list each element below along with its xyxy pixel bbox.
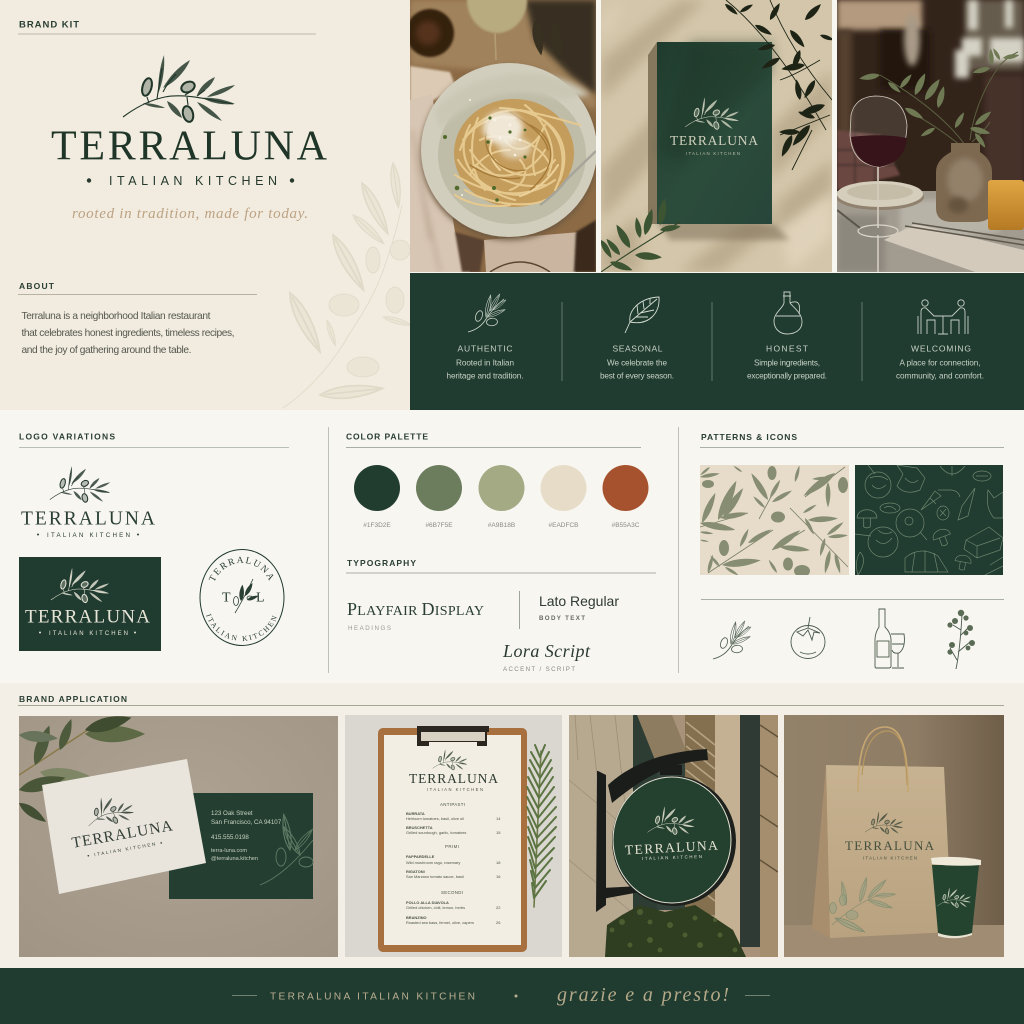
sample: body font: Lato Regular	[539, 593, 619, 609]
swatch: terracotta	[602, 465, 648, 529]
napkin and cutlery	[884, 224, 1024, 272]
panel: color palette	[346, 432, 648, 529]
menu text: San Marzano tomato sauce, basil	[406, 874, 464, 879]
icon: olive sprig	[713, 620, 752, 659]
icon: leaf	[625, 297, 659, 333]
photo: pasta plate	[406, 0, 597, 272]
value: welcoming: A place for connection,	[900, 358, 980, 368]
heading: brand application: BRAND APPLICATION	[19, 694, 127, 704]
primary logo on light: ITALIAN KITCHEN	[47, 532, 130, 539]
icon: tomato	[791, 617, 825, 658]
menu text: 22	[496, 905, 501, 910]
menu text: 26	[496, 920, 501, 925]
menu text: Roasted sea bass, fennel, olive, capers	[406, 920, 474, 925]
value: welcoming	[896, 300, 984, 380]
menu text: 14	[496, 816, 501, 821]
menu text: TERRALUNA	[409, 771, 498, 786]
menu text: BRANZINO	[406, 915, 427, 920]
vase	[936, 143, 992, 222]
stone wall	[569, 715, 635, 957]
value: seasonal: best of every season.	[600, 372, 674, 380]
primary logo	[51, 55, 328, 222]
white logo card	[42, 759, 206, 894]
about text	[22, 311, 234, 356]
menu text: BRUSCHETTA	[406, 825, 433, 830]
mockup: paper bag and cup	[784, 715, 1004, 957]
footer script sign-off: grazie e a presto!	[557, 984, 729, 1006]
bag	[812, 727, 952, 938]
olive leaves	[16, 711, 145, 826]
footer band	[0, 968, 1024, 1024]
mockup: business cards	[16, 711, 338, 957]
sample: script font: ACCENT / SCRIPT	[503, 666, 575, 673]
heading: about: ABOUT	[19, 281, 55, 291]
value: authentic	[446, 293, 524, 380]
menu text: Wild mushroom ragu, rosemary	[406, 860, 460, 865]
menu text: 18	[496, 860, 501, 865]
menu text: 15	[496, 830, 501, 835]
sample: body font: BODY TEXT	[539, 615, 585, 622]
value: authentic: heritage and tradition.	[446, 372, 524, 380]
logo tagline: italian kitchen: ITALIAN KITCHEN	[109, 174, 277, 188]
about text: Terraluna is a neighborhood Italian restaurant	[22, 311, 211, 322]
circular badge logo: TERRALUNA	[208, 556, 274, 582]
about text: that celebrates honest ingredients, timeless recipes,	[22, 328, 234, 339]
swatch: olive: #6B7F5E	[425, 522, 453, 529]
menu text: ITALIAN KITCHEN	[427, 787, 483, 792]
heading: brand kit: BRAND KIT	[19, 20, 79, 30]
green contact card	[169, 793, 314, 899]
panel: patterns and icons	[699, 432, 1004, 669]
swatch: cream: #EADFCB	[549, 522, 578, 529]
watermark olive branch	[283, 162, 413, 408]
menu text: Grilled sourdough, garlic, tomatoes	[406, 830, 466, 835]
round sign: ITALIAN KITCHEN	[642, 854, 702, 861]
panel: logo variations	[19, 432, 289, 651]
heading: patterns and icons: PATTERNS & ICONS	[701, 432, 797, 442]
icon: olive sprig	[468, 293, 507, 332]
menu text: 16	[496, 874, 501, 879]
value: seasonal	[600, 297, 674, 380]
value: honest: HONEST	[766, 344, 808, 354]
primary logo on light	[21, 466, 155, 539]
panel: brand application	[0, 683, 1024, 1024]
mockup: menu clipboard	[345, 715, 562, 957]
green contact card: San Francisco, CA 94107	[211, 819, 282, 826]
round sign	[612, 776, 736, 906]
circular badge logo: L	[256, 590, 265, 606]
olive sprig in vase	[859, 47, 1020, 149]
value: authentic: AUTHENTIC	[458, 344, 512, 354]
icon: wine bottle and glass	[875, 609, 904, 668]
panel: typography	[346, 558, 656, 673]
metal clip	[417, 726, 489, 746]
wine glass	[850, 96, 907, 272]
swatch: cream	[540, 465, 586, 529]
value: welcoming: WELCOMING	[911, 344, 971, 354]
sample: script font: Lora Script	[502, 641, 591, 661]
circular badge logo: ITALIAN KITCHEN	[206, 614, 277, 642]
sample: body font	[539, 593, 619, 622]
footer brand name: TERRALUNA ITALIAN KITCHEN	[270, 992, 475, 1002]
green menu book: ITALIAN KITCHEN	[686, 151, 740, 156]
menu text: POLLO ALLA DIAVOLA	[406, 900, 449, 905]
heading: typography: TYPOGRAPHY	[347, 558, 416, 568]
sample: heading font: PLAYFAIR DISPLAY	[347, 599, 484, 619]
swatch: deep green: #1F3D2E	[363, 522, 391, 529]
swatch: sage: #A9B18B	[488, 522, 515, 529]
round sign: TERRALUNA	[625, 838, 718, 857]
swatch: sage	[478, 465, 524, 529]
swatch: terracotta: #B55A3C	[612, 522, 640, 529]
menu text: SECONDI	[441, 890, 463, 895]
menu text: PAPPARDELLE	[406, 854, 435, 859]
sample: heading font	[347, 599, 484, 632]
white logo card: TERRALUNA	[70, 817, 175, 852]
menu text: BURRATA	[406, 811, 425, 816]
green contact card: terra-luna.com	[211, 848, 247, 854]
value: honest: exceptionally prepared.	[747, 372, 827, 380]
icon: herb sprig	[947, 610, 975, 669]
sample: heading font: HEADINGS	[348, 625, 391, 632]
green menu book	[648, 42, 790, 240]
swatch: olive	[416, 465, 462, 529]
green contact card: @terraluna.kitchen	[211, 856, 258, 862]
green contact card: 123 Oak Street	[211, 810, 253, 817]
photo: restaurant table with wine	[836, 0, 1024, 272]
menu text: RIGATONI	[406, 869, 425, 874]
shrub	[605, 905, 746, 957]
bag: TERRALUNA	[845, 838, 935, 853]
script slogan: rooted in tradition, made for today.	[72, 206, 308, 222]
about text: and the joy of gathering around the table.	[22, 345, 192, 356]
value: seasonal: SEASONAL	[612, 344, 663, 354]
value: authentic: Rooted in Italian	[456, 358, 514, 368]
pattern: olive branches	[699, 465, 849, 577]
circular badge logo: T	[222, 590, 231, 606]
value: honest: Simple ingredients,	[754, 358, 820, 368]
menu text: ANTIPASTI	[440, 802, 465, 807]
reversed logo on green: TERRALUNA	[25, 606, 150, 628]
pattern: food line drawings	[855, 465, 1003, 575]
candle glass	[988, 180, 1024, 230]
heading: logo variations: LOGO VARIATIONS	[19, 432, 115, 442]
rosemary sprig	[527, 745, 556, 907]
small plate	[837, 194, 924, 210]
primary logo on light: TERRALUNA	[21, 508, 155, 530]
menu text: Heirloom tomatoes, basil, olive oil	[406, 816, 464, 821]
menu text: PRIMI	[445, 844, 459, 849]
reversed logo on green: ITALIAN KITCHEN	[49, 631, 128, 637]
reversed logo on green	[19, 557, 161, 651]
icon: diners at table	[918, 300, 968, 334]
mockup: hanging sign	[569, 715, 778, 957]
value: welcoming: community, and comfort.	[896, 372, 984, 380]
panel: brand kit intro	[0, 0, 413, 410]
white logo card: ITALIAN KITCHEN	[94, 842, 156, 857]
icon: oil bottle	[774, 292, 802, 334]
circular badge logo	[200, 549, 284, 646]
bag: ITALIAN KITCHEN	[863, 856, 917, 860]
value: seasonal: We celebrate the	[607, 358, 667, 368]
photo: menu on sunlit wall	[598, 0, 835, 273]
logo wordmark: TERRALUNA	[51, 124, 328, 170]
sample: script font	[502, 641, 591, 673]
sign bracket	[596, 749, 708, 912]
menu text: Grilled chicken, chili, lemon, herbs	[406, 905, 465, 910]
heading: color palette: COLOR PALETTE	[346, 432, 428, 442]
swatch: deep green	[354, 465, 400, 529]
menu text	[406, 771, 501, 925]
coffee cup	[931, 857, 981, 938]
icon: olive branch	[123, 55, 235, 123]
green menu book: TERRALUNA	[670, 133, 758, 148]
panel: brand values band	[410, 273, 1024, 410]
green contact card: 415.555.0198	[211, 834, 249, 841]
value: honest	[747, 292, 827, 380]
